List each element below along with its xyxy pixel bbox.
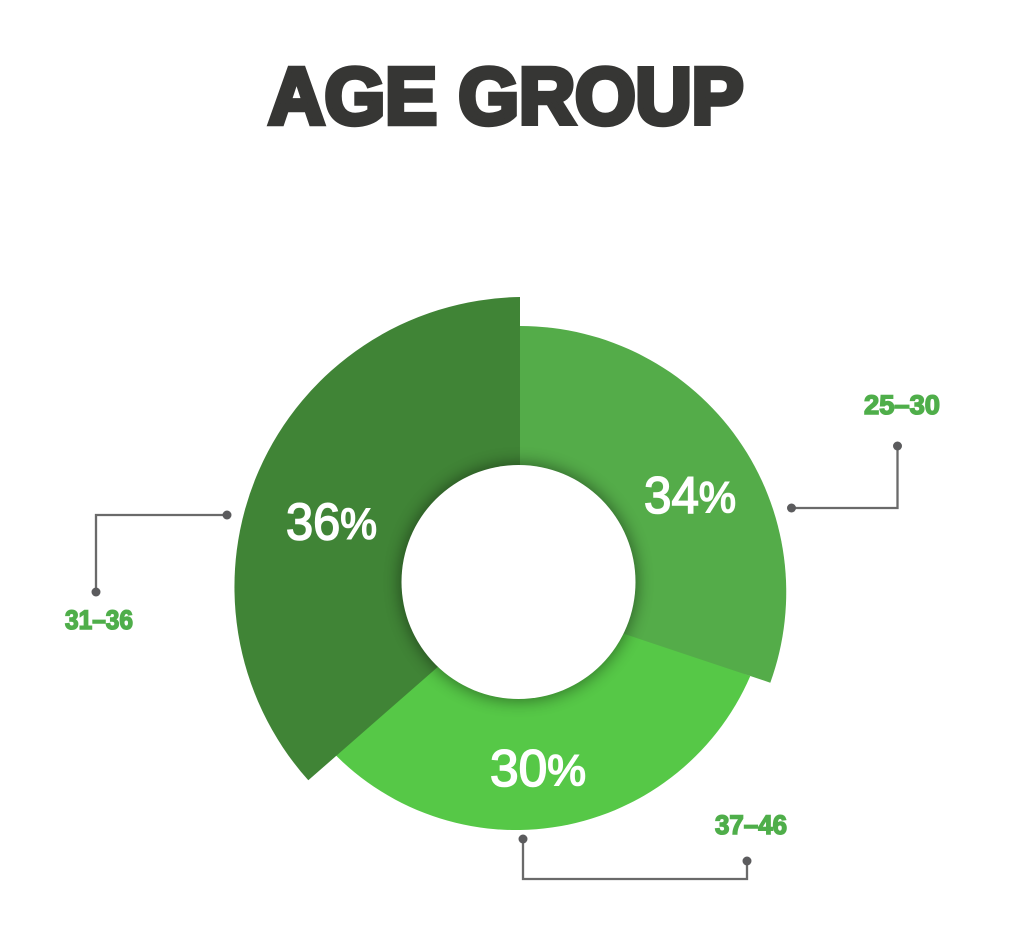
value: 30%: 30 (490, 740, 548, 798)
value: 34%: % (699, 473, 736, 522)
label: 31-36: 31–36 (65, 605, 133, 635)
donut chart (234, 297, 786, 830)
connector: 25-30 (787, 442, 902, 512)
label: 25-30: 25–30 (864, 390, 940, 420)
donut hole (402, 465, 636, 699)
value: 36%: % (340, 500, 377, 548)
segment: 37-46 30% (320, 590, 750, 830)
value: 36%: 36 (286, 494, 344, 552)
donut hole shadow (400, 463, 638, 701)
connector: 31-36 (92, 510, 232, 596)
value: 34%: 34 (644, 467, 702, 525)
segment: 31-36 36% (234, 297, 520, 780)
value: 30%: % (547, 746, 586, 795)
title: AGE GROUP (268, 52, 744, 140)
label: 37-46: 37–46 (715, 810, 787, 840)
segment: 25-30 34% (520, 326, 786, 683)
connector: 37-46 (518, 834, 752, 879)
